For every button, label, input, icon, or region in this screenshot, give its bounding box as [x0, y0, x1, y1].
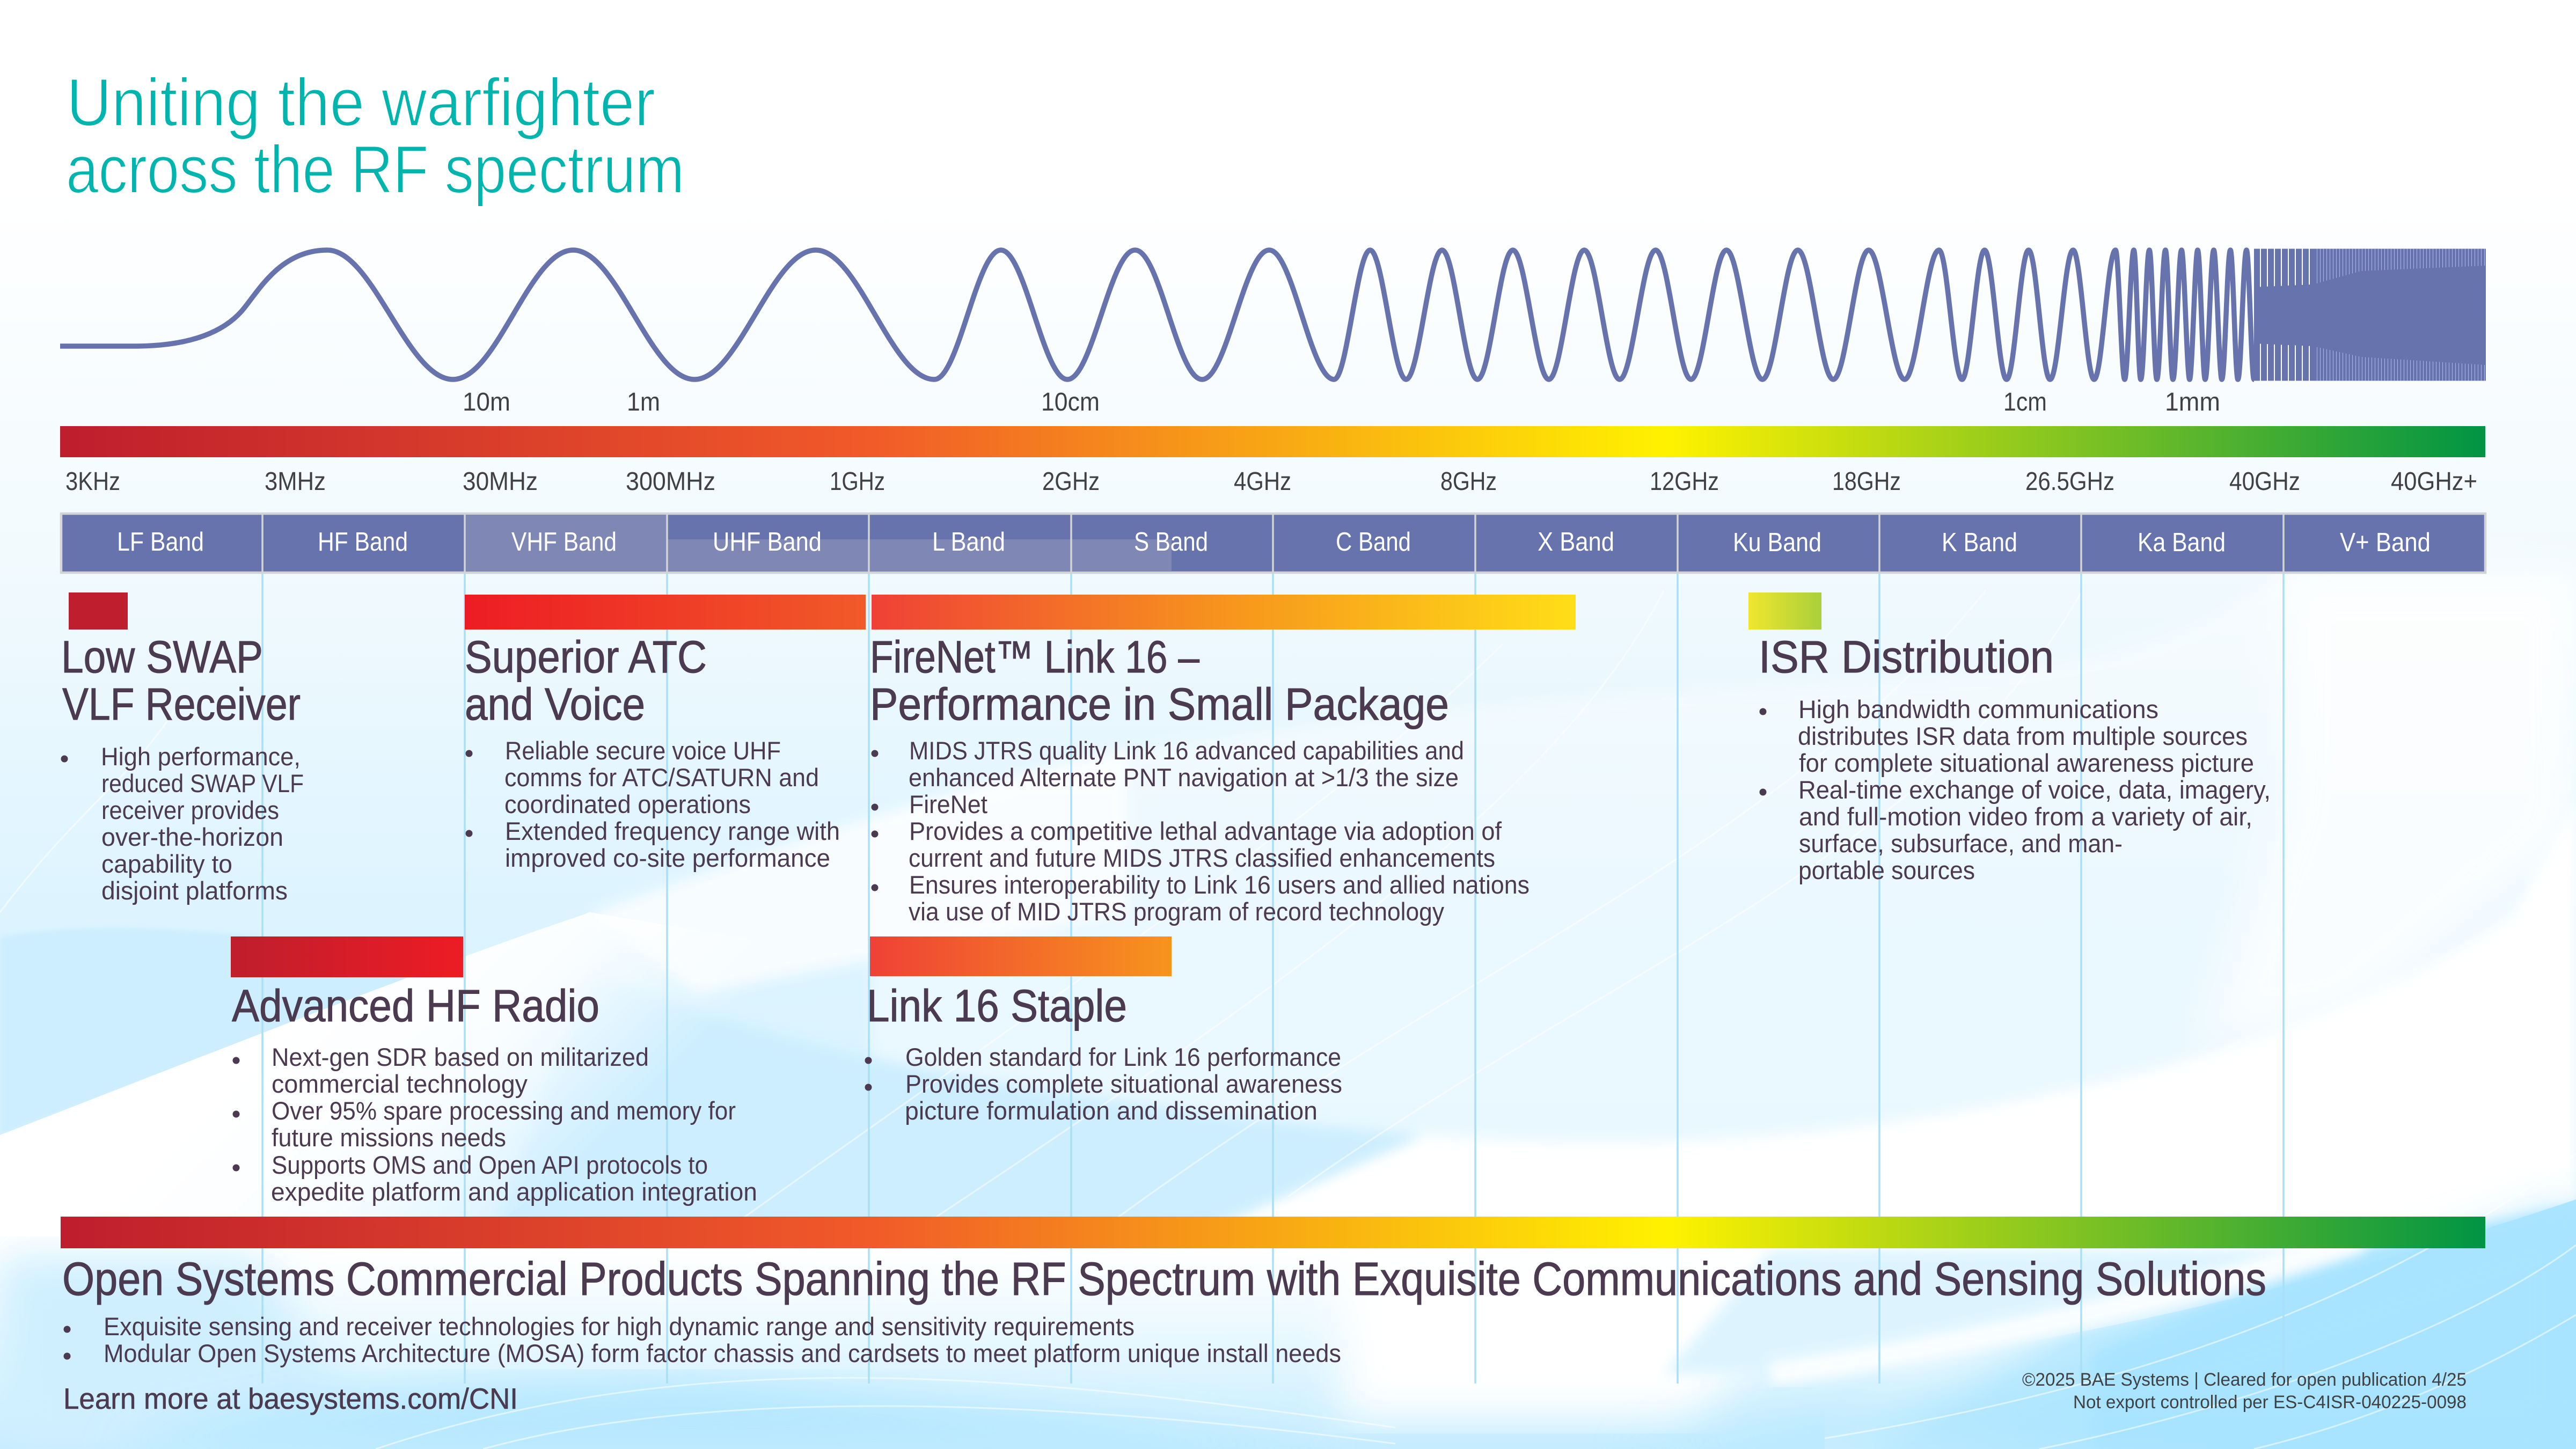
bullet text: Over 95% spare processing and memory for: [272, 1096, 736, 1125]
wavelength labels: 1m: [627, 388, 660, 416]
bullet text: enhanced Alternate PNT navigation at >1/3 the size: [909, 763, 1459, 792]
bullet text: over-the-horizon: [101, 823, 283, 851]
heading: Advanced HF Radio: [232, 980, 599, 1031]
heading: Link 16 Staple: [867, 980, 1127, 1031]
bullet text: Golden standard for Link 16 performance: [905, 1043, 1341, 1071]
bullet text: MIDS JTRS quality Link 16 advanced capabilities and: [909, 736, 1464, 765]
heading: [465, 632, 707, 729]
title: Uniting the warfighter: [67, 65, 655, 140]
frequency labels: 300MHz: [626, 467, 715, 496]
frequency labels: 30MHz: [463, 467, 538, 496]
heading: FireNet™ Link 16 –: [870, 632, 1199, 682]
panel: ISR Distribution: [1748, 592, 2271, 884]
bullet text: coordinated operations: [504, 790, 751, 818]
bullet text: [63, 1312, 1341, 1367]
heading: Superior ATC: [465, 632, 707, 682]
bullet text: capability to: [101, 850, 232, 878]
heading: Open Systems Commercial Products Spanning the RF Spectrum with Exquisite Communications and Sensing Solutions: [62, 1253, 2266, 1305]
heading: [61, 632, 301, 729]
bullet text: Extended frequency range with: [505, 817, 840, 845]
frequency labels: 2GHz: [1042, 467, 1100, 496]
wavelength labels: 10cm: [1041, 388, 1100, 416]
band guide lines: [262, 574, 2284, 1384]
frequency labels: 12GHz: [1650, 467, 1719, 496]
bullet text: Provides complete situational awareness: [905, 1070, 1342, 1098]
title: [66, 65, 684, 207]
bullet text: [466, 736, 840, 872]
bullet text: receiver provides: [101, 796, 279, 824]
VHF to S band highlight: [465, 515, 1172, 572]
heading: Low SWAP: [61, 632, 263, 682]
learn more link: Learn more at baesystems.com/CNI: [63, 1382, 518, 1415]
bullet text: and full-motion video from a variety of air,: [1799, 802, 2252, 831]
bullet text: surface, subsurface, and man-: [1799, 829, 2123, 858]
panel: open systems: [62, 1253, 2266, 1367]
bullet text: Modular Open Systems Architecture (MOSA) form factor chassis and cardsets to meet platform unique install needs: [104, 1339, 1341, 1367]
bullet text: future missions needs: [272, 1123, 506, 1152]
band table: V+ Band: [2340, 528, 2431, 557]
band table: X Band: [1538, 528, 1614, 557]
heading: Performance in Small Package: [870, 679, 1449, 729]
bullet text: disjoint platforms: [101, 876, 288, 905]
frequency labels: 3MHz: [265, 467, 326, 496]
bullet text: [61, 742, 304, 905]
copyright notice: Not export controlled per ES-C4ISR-040225-0098: [2073, 1392, 2467, 1413]
bullet text: High performance,: [101, 742, 301, 771]
frequency labels: 1GHz: [830, 467, 885, 496]
band table: Ku Band: [1733, 528, 1821, 557]
bullet text: commercial technology: [272, 1070, 528, 1098]
wavelength labels: 1cm: [2003, 388, 2047, 416]
bullet text: Next-gen SDR based on militarized: [272, 1043, 649, 1071]
bullet text: [233, 1043, 757, 1206]
frequency labels: 4GHz: [1234, 467, 1291, 496]
panel: Link 16 Staple: [865, 936, 1342, 1125]
copyright notice: [2022, 1370, 2467, 1413]
frequency labels: 18GHz: [1832, 467, 1901, 496]
band table: C Band: [1336, 528, 1411, 557]
band table: L Band: [932, 528, 1005, 557]
bullet text: current and future MIDS JTRS classified enhancements: [909, 844, 1495, 872]
wavelength labels: 1mm: [2165, 388, 2220, 416]
bullet text: portable sources: [1798, 856, 1975, 884]
wavelength labels: 10m: [463, 388, 510, 416]
frequency labels: 8GHz: [1440, 467, 1497, 496]
bottom gradient bar: [61, 1217, 2485, 1248]
panel: Superior ATC and Voice: [465, 595, 866, 872]
frequency labels: [65, 467, 2477, 496]
heading: [870, 632, 1449, 729]
band table: HF Band: [318, 528, 408, 557]
bullet text: Exquisite sensing and receiver technologies for high dynamic range and sensitivity requirements: [104, 1312, 1135, 1341]
bullet text: for complete situational awareness picture: [1799, 749, 2254, 777]
frequency labels: 40GHz: [2229, 467, 2300, 496]
bullet text: expedite platform and application integration: [271, 1177, 757, 1206]
band table: [61, 514, 2485, 573]
panel: Advanced HF Radio: [231, 936, 757, 1206]
panel: FireNet Link 16: [870, 595, 1576, 926]
bullet text: Real-time exchange of voice, data, imagery,: [1798, 775, 2271, 804]
bullet text: via use of MID JTRS program of record technology: [909, 897, 1444, 926]
bullet text: distributes ISR data from multiple sources: [1798, 722, 2248, 750]
bullet text: reduced SWAP VLF: [101, 769, 304, 797]
frequency labels: 3KHz: [65, 467, 120, 496]
bullet text: comms for ATC/SATURN and: [504, 763, 819, 792]
title: across the RF spectrum: [66, 133, 684, 207]
heading: VLF Receiver: [62, 679, 301, 729]
bullet text: [1759, 695, 2271, 884]
copyright notice: ©2025 BAE Systems | Cleared for open publication 4/25: [2022, 1370, 2467, 1390]
band table: VHF Band: [511, 528, 617, 557]
band table: K Band: [1942, 528, 2017, 557]
bullet text: FireNet: [909, 790, 987, 818]
band table: UHF Band: [713, 528, 822, 557]
bullet text: improved co-site performance: [505, 844, 830, 872]
heading: and Voice: [465, 679, 645, 729]
bullet text: Provides a competitive lethal advantage via adoption of: [909, 817, 1502, 845]
bullet text: [872, 736, 1529, 926]
bullet text: High bandwidth communications: [1798, 695, 2158, 723]
bullet text: Reliable secure voice UHF: [505, 736, 781, 765]
frequency labels: 40GHz+: [2391, 467, 2477, 496]
spectrum gradient bar: [60, 426, 2485, 457]
band table: S Band: [1134, 528, 1208, 557]
band table: LF Band: [117, 528, 204, 557]
wavelength labels: [463, 388, 2220, 416]
heading: ISR Distribution: [1759, 632, 2054, 682]
band table: Ka Band: [2138, 528, 2226, 557]
bullet text: Supports OMS and Open API protocols to: [272, 1151, 708, 1179]
RF wave chart: [60, 250, 2486, 379]
frequency labels: 26.5GHz: [2025, 467, 2114, 496]
bullet text: [865, 1043, 1342, 1125]
panel: Low SWAP VLF Receiver: [61, 592, 304, 905]
bullet text: Ensures interoperability to Link 16 users and allied nations: [909, 870, 1529, 899]
bullet text: picture formulation and dissemination: [905, 1096, 1318, 1125]
